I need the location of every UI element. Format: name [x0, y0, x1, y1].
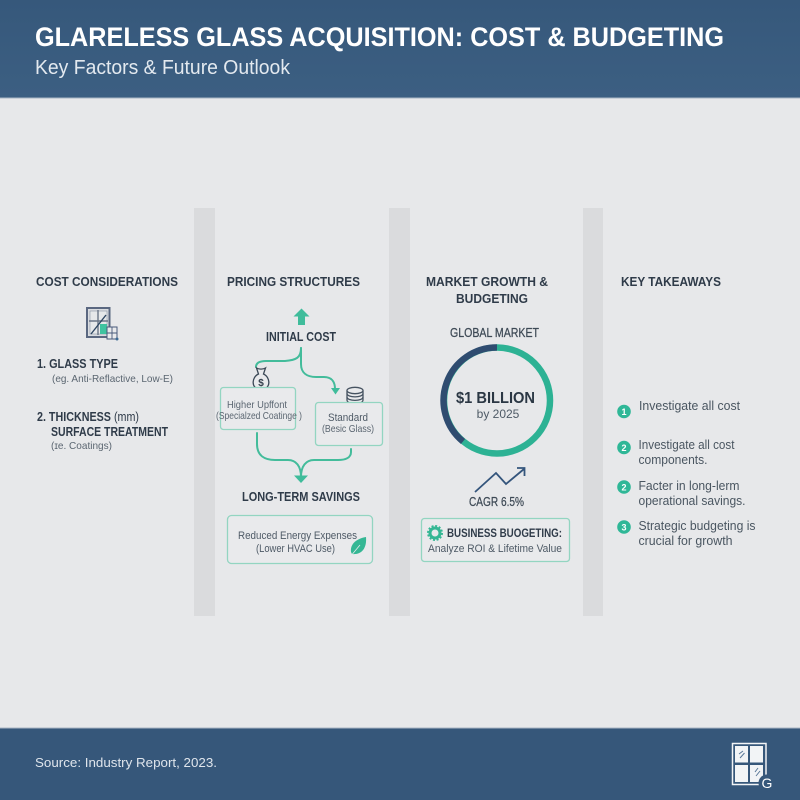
- heading: market growth and budgeting: [426, 274, 548, 306]
- icon: money bag: $: [258, 378, 264, 389]
- box: standard: Standard: [328, 412, 368, 424]
- takeaway 2: Investigate all cost: [638, 438, 735, 452]
- box: higher upfront: (Specialzed Coatinge ): [216, 410, 302, 422]
- takeaway 4: 3: [621, 522, 627, 532]
- connector: boxes to long-term savings: [257, 433, 351, 477]
- panel: market growth and budgeting: [422, 274, 570, 562]
- takeaway 4: Strategic budgeting is: [638, 519, 756, 533]
- box: business budgeting: [422, 518, 570, 562]
- takeaway 2: 2: [621, 443, 627, 453]
- takeaway 1: Investigate all cost: [639, 399, 741, 413]
- list item: thickness and surface treatment: 2. THICKNESS (mm): [37, 410, 139, 424]
- icon: leaf: [350, 537, 366, 557]
- takeaway 3: [617, 479, 746, 508]
- arrowhead: long-term savings: [294, 476, 308, 483]
- icon: money bag: [253, 368, 269, 390]
- heading: pricing structures: PRICING STRUCTURES: [227, 274, 360, 289]
- donut chart: $1 BILLION: [456, 390, 535, 407]
- icon: window logo: G: [762, 775, 772, 791]
- list item: thickness and surface treatment: SURFACE TREATMENT: [51, 425, 168, 439]
- list item: glass type: (eg. Anti-Reflactive, Low-E): [52, 373, 173, 385]
- arrow: up: [294, 308, 310, 325]
- label: global market: GLOBAL MARKET: [450, 326, 539, 340]
- box: higher upfront: Higher Upffont: [227, 399, 287, 411]
- heading: key takeaways: KEY TAKEAWAYS: [621, 274, 721, 289]
- heading: market growth and budgeting: MARKET GROWTH &: [426, 274, 548, 289]
- donut chart: by 2025: [477, 407, 520, 421]
- panel: cost considerations: [36, 274, 178, 452]
- takeaway 4: crucial for growth: [638, 534, 733, 548]
- takeaway 2: [617, 438, 735, 467]
- list item: glass type: 1. GLASS TYPE: [37, 357, 118, 371]
- icon: coin stack: [347, 387, 363, 404]
- takeaway 4: [617, 519, 756, 548]
- donut chart: [444, 347, 550, 454]
- heading: market growth and budgeting: BUDGETING: [456, 291, 528, 306]
- panel: key takeaways: [617, 274, 756, 548]
- box: reduced energy expenses: (Lower HVAC Use): [256, 543, 335, 555]
- label: initial cost: INITIAL COST: [266, 330, 336, 344]
- takeaway 2: components.: [638, 453, 708, 467]
- takeaway 3: operational savings.: [638, 494, 746, 508]
- source note: Source: Industry Report, 2023.: [35, 756, 217, 770]
- box: reduced energy expenses: Reduced Energy Expenses: [238, 530, 357, 542]
- box: standard: (Besic Glass): [322, 423, 374, 435]
- icon: window with glass sample: [87, 308, 118, 340]
- takeaway 3: 2: [621, 482, 627, 492]
- box: business budgeting: Analyze ROI & Lifetime Value: [428, 543, 562, 555]
- label: CAGR: CAGR 6.5%: [469, 495, 524, 509]
- icon: growth arrow: [475, 468, 524, 492]
- heading: cost considerations: COST CONSIDERATIONS: [36, 274, 178, 289]
- box: standard: [316, 402, 382, 446]
- box: reduced energy expenses: [228, 516, 372, 564]
- takeaway 3: Facter in long-lerm: [638, 479, 740, 493]
- footer banner: [0, 728, 800, 800]
- takeaway 1: 1: [621, 407, 627, 417]
- connector: initial cost to higher upfront: [256, 348, 301, 367]
- label: long-term savings: LONG-TERM SAVINGS: [242, 490, 360, 504]
- list item: thickness and surface treatment: (ɪe. Coatings): [51, 440, 112, 452]
- box: business budgeting: BUSINESS BUOGETING:: [447, 528, 562, 540]
- header banner: [0, 0, 800, 98]
- subtitle: Key Factors & Future Outlook: [35, 57, 291, 79]
- icon: window logo: [732, 744, 776, 792]
- box: higher upfront: [216, 388, 302, 430]
- icon: gear: [428, 526, 442, 540]
- panel: pricing structures: [216, 274, 382, 564]
- list item: glass type: [37, 357, 173, 385]
- takeaway 1: [617, 399, 741, 418]
- title: GLARELESS GLASS ACQUISITION: COST & BUDGETING: [35, 22, 724, 52]
- connector: initial cost to standard: [301, 348, 335, 389]
- list item: thickness and surface treatment: [37, 410, 168, 452]
- arrowhead: standard: [331, 388, 340, 394]
